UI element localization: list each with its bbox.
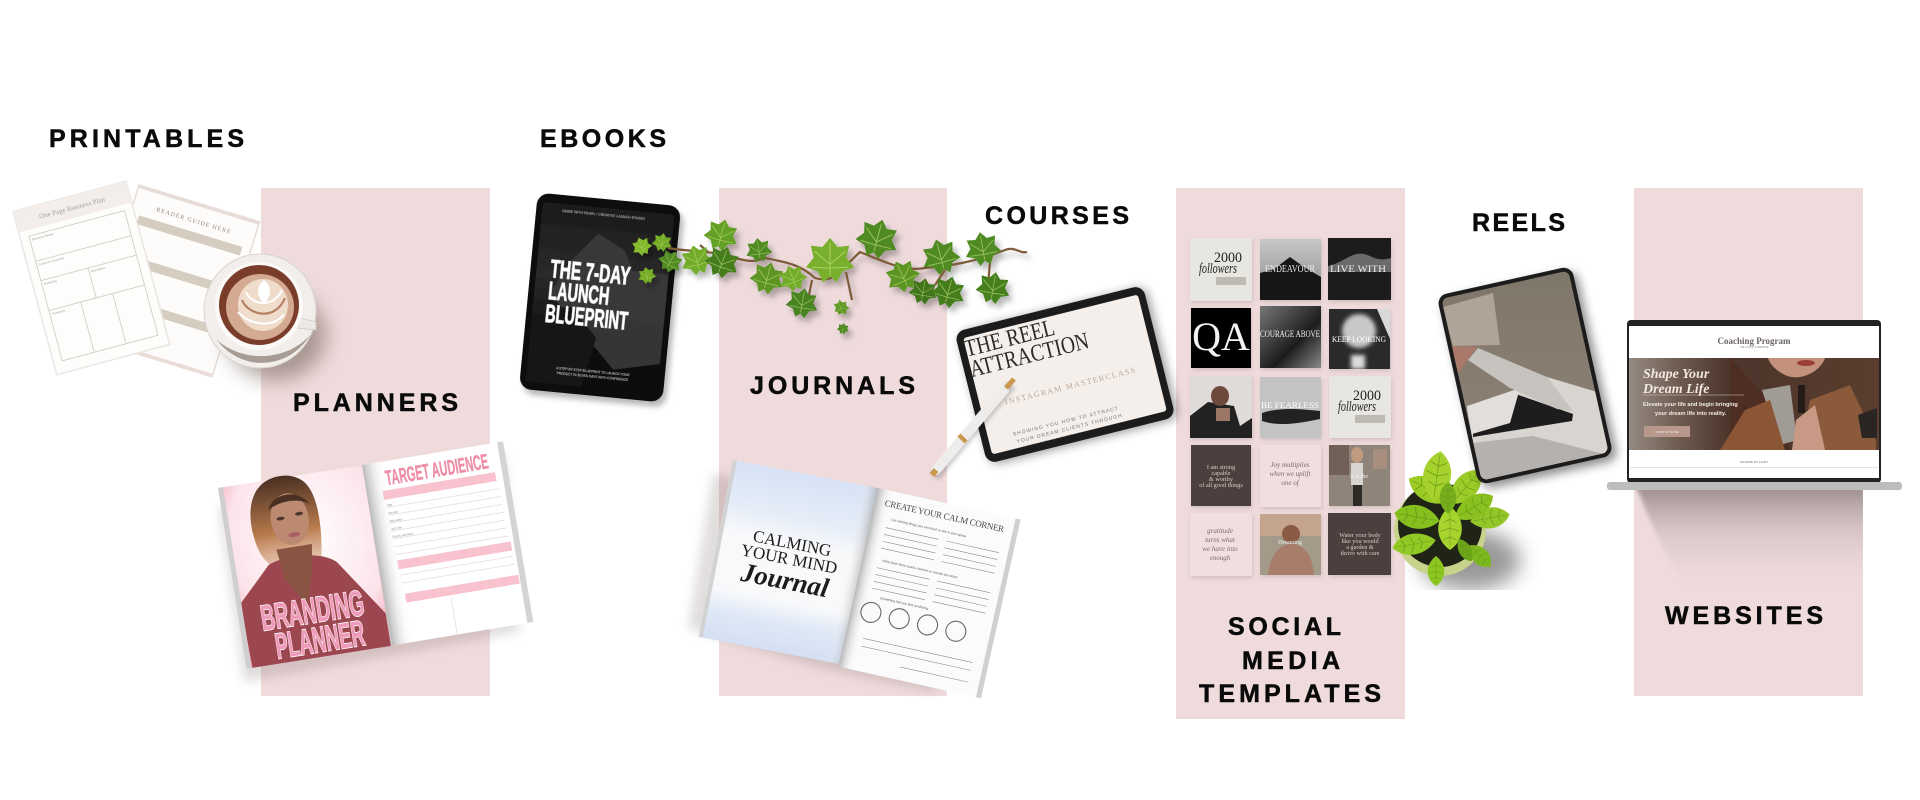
heading: planners: PLANNERS (293, 389, 458, 417)
journal left page: cover: CALMING (751, 526, 833, 560)
planner right page: target audience: Age (387, 503, 393, 507)
heading: courses: COURSES (985, 202, 1129, 230)
course tablet (954, 284, 1179, 466)
journal right page: calm corner worksheet (838, 488, 1021, 698)
panel: planners background (261, 188, 490, 696)
template: endeavour: ENDEAVOUR (1265, 264, 1315, 275)
printable sheet: one page business plan: Financials (51, 308, 66, 316)
printable sheet: one page business plan (13, 181, 170, 375)
book shadow: journal (688, 473, 938, 693)
printable sheet: one page business plan: Business Details (31, 232, 54, 241)
course tablet screen text (964, 320, 1135, 448)
template: keep looking (1329, 309, 1390, 369)
laptop website mockup: THE COACH'S WEBSITE (1740, 346, 1769, 349)
template: photo room (1329, 445, 1390, 506)
journal right page: calm corner worksheet: Something that you find comforting (880, 596, 929, 611)
course tablet screen text: INSTAGRAM REELS (1020, 431, 1082, 452)
course tablet screen text: SHOWING YOU HOW TO ATTRACT (1012, 406, 1119, 438)
ebook tablet: LAUNCH (547, 277, 610, 311)
template: be fearless: BE FEARLESS (1261, 400, 1319, 410)
infographic canvas (12, 129, 1902, 719)
heading: journals: JOURNALS (750, 372, 915, 400)
planner right page: target audience: Job Title (391, 525, 403, 531)
template: affirmation brown (1191, 445, 1251, 506)
template: 2000 followers: followers (1199, 261, 1237, 277)
planner book (218, 441, 533, 682)
laptop shadow (1635, 490, 1863, 559)
template: 2000 followers: 2000 (1214, 250, 1242, 266)
laptop website mockup (1607, 320, 1902, 490)
template: water your body: thrive with care (1341, 550, 1380, 557)
website hero photo: WORK WITH ME (1655, 430, 1679, 434)
journal right page: calm corner worksheet: Write down three scents, textures or sounds you enjoy (882, 559, 958, 579)
template: affirmation brown: of all good things (1199, 482, 1243, 489)
template: gratitude script: we have into (1202, 545, 1238, 553)
heading: websites: WEBSITES (1665, 602, 1823, 630)
ebook tablet: PRODUCT IN SEVEN DAYS WITH CONFIDENCE (557, 371, 628, 382)
template: photo winter: Dreaming (1278, 540, 1302, 546)
ebook tablet: GUIDE WITH PEARL / CREATIVE LAUNCH STUDIO (562, 209, 645, 221)
vine stem (668, 245, 1027, 300)
panel: journals background (719, 188, 947, 696)
template: endeavour (1260, 239, 1321, 300)
planner left page: portrait cover: PLANNER (272, 612, 368, 667)
template: q and a: QA (1192, 314, 1250, 359)
ebook tablet (519, 193, 681, 402)
planner right page: target audience: Gender (388, 510, 399, 515)
course tablet screen text: YOUR DREAM CLIENTS THROUGH (1016, 413, 1123, 445)
template: affirmation brown: capable (1212, 470, 1231, 477)
printable sheet: one page business plan: Operations (91, 265, 106, 273)
journal left page: cover: YOUR MIND (739, 540, 839, 578)
icon: coffee cup on saucer (204, 254, 326, 380)
template: water your body: Water your body (1339, 532, 1382, 539)
icon: pen (932, 379, 1014, 477)
heading: ebooks: EBOOKS (540, 125, 666, 153)
template: photo winter (1260, 514, 1321, 575)
course tablet screen text: ATTRACTION (967, 328, 1092, 383)
template: 2000 followers repeat: followers (1338, 399, 1376, 415)
vine leaves (629, 214, 1013, 335)
heading: reels: REELS (1472, 209, 1565, 237)
heading: social media templates: SOCIAL (1228, 613, 1341, 641)
template: gratitude script: turns what (1205, 536, 1236, 544)
reels tablet screen photo (1442, 272, 1608, 480)
template: water your body: like you would (1341, 538, 1379, 545)
book shadow: planner (219, 452, 519, 682)
website hero photo: Shape Your (1643, 367, 1710, 382)
journal left page: cover: Journal (738, 557, 832, 603)
heading: printables: PRINTABLES (49, 125, 244, 153)
template: affirmation brown: & worthy (1209, 476, 1234, 483)
template: keep looking: KEEP LOOKING (1332, 334, 1386, 344)
heading: social media templates: TEMPLATES (1199, 680, 1381, 708)
planner left page: portrait cover: BRANDING (258, 582, 367, 639)
ebook tablet: BLUEPRINT (544, 300, 629, 336)
template: photo portrait (1190, 376, 1252, 438)
planner right page: target audience: Family Situation (392, 531, 414, 539)
template: courage above: COURAGE ABOVE (1260, 329, 1320, 339)
course tablet screen text: INSTAGRAM MASTERCLASS (1004, 366, 1136, 407)
printable sheet: reader guide: READER GUIDE HERE (155, 207, 232, 236)
template: joy script: one of (1281, 479, 1300, 487)
template: water your body: a garden & (1346, 544, 1374, 551)
website hero photo: your dream life into reality. (1655, 411, 1727, 417)
template: affirmation brown: I am strong (1207, 464, 1235, 471)
template: joy script: Joy multiplies (1270, 461, 1310, 469)
template: water your body (1328, 513, 1391, 575)
planner right page: target audience: Education (389, 517, 403, 523)
reels tablet (1430, 260, 1620, 490)
journal left page: cover (699, 460, 878, 665)
template: 2000 followers repeat (1329, 376, 1391, 438)
template: photo room: It is the (1350, 474, 1368, 480)
icon: potted plant (1391, 449, 1520, 590)
heading: social media templates: MEDIA (1242, 647, 1340, 675)
journal book (688, 460, 1021, 698)
heading: social media templates (1199, 613, 1381, 708)
ivy vine (629, 214, 1027, 335)
website hero photo (1629, 358, 1879, 450)
template: gratitude script (1190, 513, 1252, 576)
template: gratitude script: enough (1210, 554, 1231, 562)
panel: social media templates background (1176, 188, 1405, 719)
template: gratitude script: gratitude (1207, 527, 1233, 535)
planner right page: target audience: TARGET AUDIENCE (384, 450, 490, 490)
laptop website mockup: CHOOSE MY LIGHT (1740, 460, 1768, 464)
template: joy script (1260, 445, 1321, 507)
planner right page: target audience (362, 441, 533, 645)
planner left page: portrait cover (218, 463, 391, 672)
laptop website mockup: Coaching Program (1717, 336, 1791, 346)
printable sheet: one page business plan: Customer Overview (38, 256, 65, 267)
template: be fearless (1260, 377, 1321, 438)
template: live with intention: LIVE WITH (1330, 265, 1386, 275)
template: 2000 followers repeat: 2000 (1353, 388, 1381, 404)
journal right page: calm corner worksheet: List calming things you can touch or see in your space (891, 518, 967, 538)
social media template grid (1190, 238, 1391, 576)
panel: websites background (1634, 188, 1863, 696)
printable sheet: one page business plan: One Page Business Plan (38, 195, 106, 221)
course tablet screen text: THE REEL (962, 315, 1058, 363)
printable sheet: reader guide (92, 185, 259, 377)
template: courage above (1260, 306, 1321, 368)
ebook tablet: THE 7-DAY (549, 255, 632, 291)
website hero photo: Dream Life (1642, 382, 1709, 397)
template: 2000 followers (1190, 238, 1252, 301)
printable sheet: one page business plan: Marketing (43, 279, 57, 286)
website hero photo: Elevate your life and begin bringing (1643, 402, 1738, 408)
template: live with intention (1328, 238, 1391, 300)
journal right page: calm corner worksheet: CREATE YOUR CALM CORNER (884, 498, 1005, 534)
template: joy script: when we uplift (1270, 470, 1311, 478)
ebook tablet: A STEP-BY-STEP BLUEPRINT TO LAUNCH YOUR (556, 366, 630, 377)
